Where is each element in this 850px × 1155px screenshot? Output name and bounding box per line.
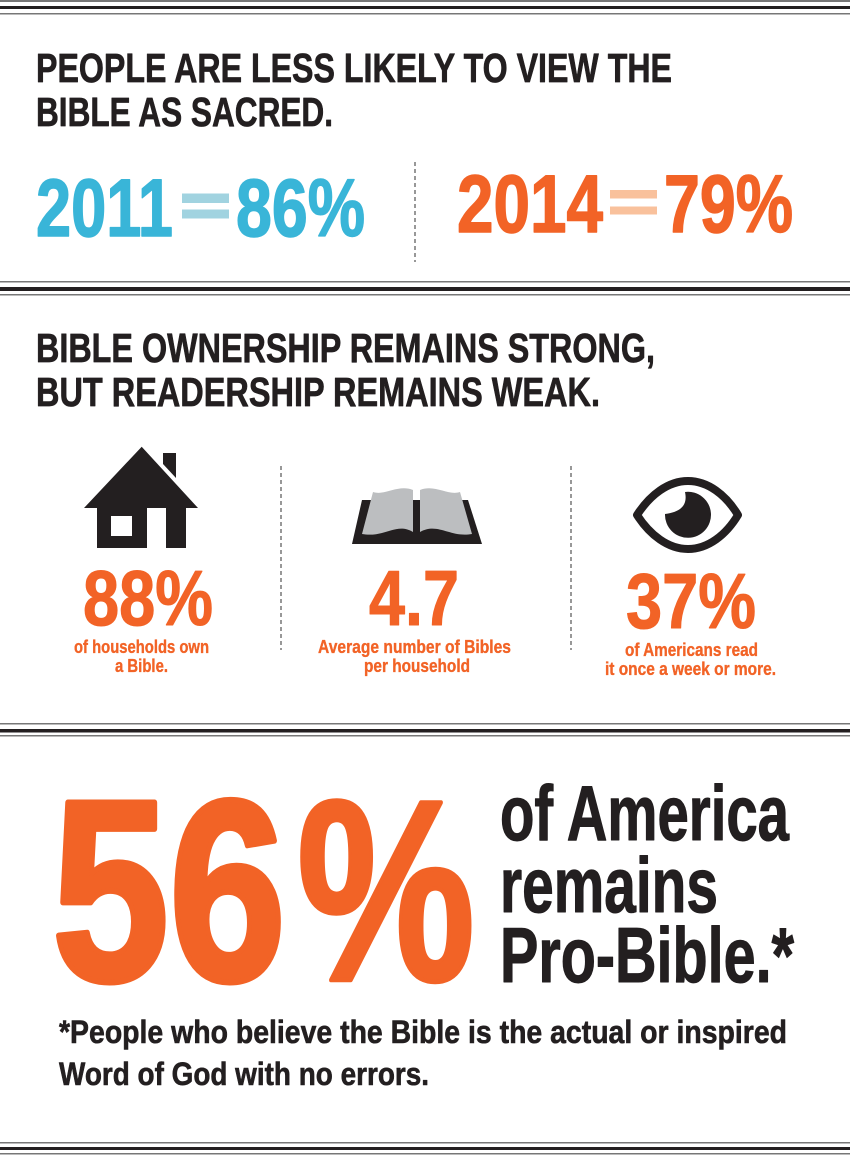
stat: 2011 equals 86%: 86%: [236, 163, 365, 254]
stat: 37% of Americans: of Americans read: [625, 640, 758, 660]
stat: 37% of Americans: 37%: [626, 557, 756, 645]
heading: sacred: BIBLE AS SACRED.: [36, 89, 333, 135]
heading: ownership: BIBLE OWNERSHIP REMAINS STRONG,: [36, 325, 655, 371]
stat: 37% of Americans: it once a week or more.: [605, 659, 776, 679]
stat: 88% of households: a Bible.: [115, 656, 168, 676]
footnote: [59, 1014, 787, 1092]
stat: 4.7 Bibles: per household: [364, 656, 470, 676]
icon: house: [84, 447, 198, 548]
stat: 2014 equals 79%: 2014: [457, 159, 603, 250]
stat: 4.7 Bibles: 4.7: [369, 554, 459, 642]
icon: open book: [352, 488, 482, 544]
panel: Bible as sacred: [36, 45, 793, 262]
stat: 2011 equals 86%: 2011: [36, 163, 173, 254]
stat: 37% of Americans: [605, 557, 776, 679]
stat: 4.7 Bibles: [318, 554, 511, 676]
stat: 2014 equals 79%: 79%: [664, 159, 793, 250]
footnote: Word of God with no errors.: [59, 1056, 429, 1092]
heading: sacred: [36, 45, 672, 135]
heading: ownership: [36, 325, 655, 415]
panel: Pro-Bible: [52, 746, 794, 1092]
text: of America remains Pro-Bible: [500, 769, 794, 999]
stat: 4.7 Bibles: Average number of Bibles: [318, 637, 511, 657]
stat: 56%: 56: [52, 746, 286, 1035]
stat: 2011 equals 86%: [36, 163, 365, 254]
stat: 88% of households: [74, 554, 213, 676]
panel: ownership and readership: [36, 325, 776, 679]
heading: sacred: PEOPLE ARE LESS LIKELY TO VIEW THE: [36, 45, 672, 91]
heading: ownership: BUT READERSHIP REMAINS WEAK.: [36, 369, 600, 415]
stat: 2014 equals 79%: [457, 159, 793, 250]
stat: 88% of households: 88%: [83, 554, 213, 642]
stat: 56%: %: [297, 746, 475, 1035]
stat: 56%: [52, 746, 475, 1035]
icon: eye: [637, 481, 738, 549]
text: of America remains Pro-Bible: remains: [500, 841, 718, 929]
stat: 88% of households: of households own: [74, 637, 209, 657]
